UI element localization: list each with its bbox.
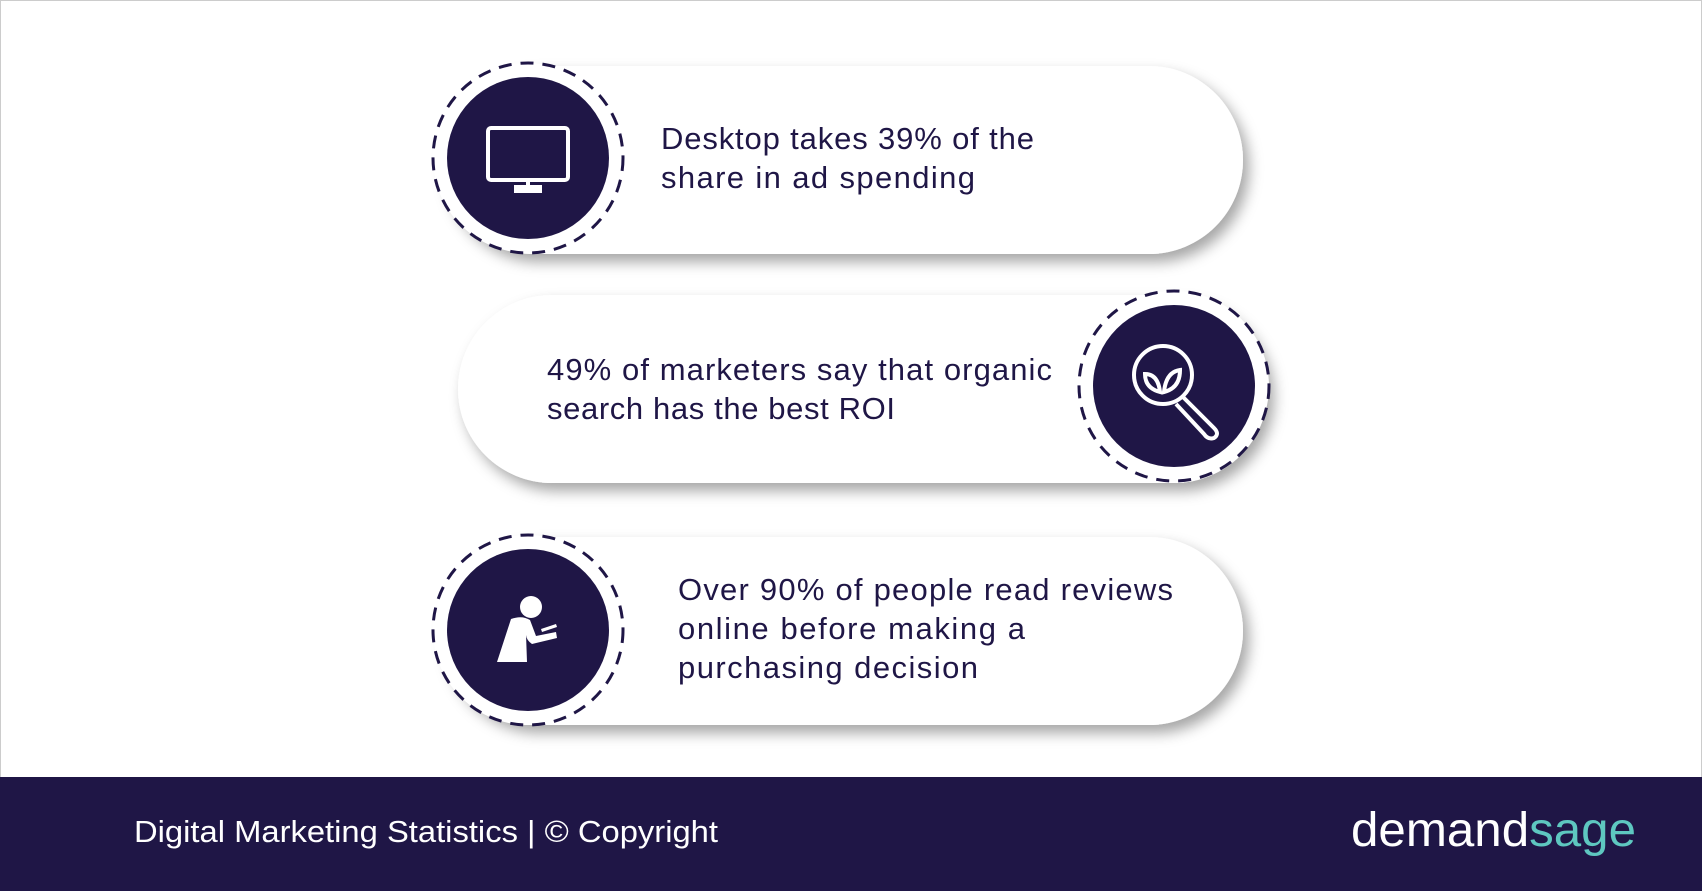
icon: person reading: [497, 596, 557, 662]
text: reviews stat: online before making a: [678, 611, 1026, 646]
footer bar: [0, 777, 1702, 891]
text: desktop stat: Desktop takes 39% of the: [661, 121, 1034, 156]
footer text: Digital Marketing Statistics | © Copyright: [134, 814, 718, 849]
text: reviews stat: purchasing decision: [678, 650, 978, 685]
icon: magnifier with leaves: [1134, 346, 1217, 438]
text: organic search stat: search has the best ROI: [547, 391, 895, 426]
panel: desktop stat: [433, 63, 1243, 254]
text: desktop stat: share in ad spending: [661, 160, 975, 195]
panel: organic search stat: [458, 291, 1269, 483]
logo: demandsage: demandsage: [1351, 804, 1636, 857]
panel: reviews stat: [433, 535, 1243, 725]
text: organic search stat: 49% of marketers say that organic: [547, 352, 1052, 387]
icon: desktop monitor: [488, 128, 568, 191]
text: reviews stat: Over 90% of people read reviews: [678, 572, 1173, 607]
